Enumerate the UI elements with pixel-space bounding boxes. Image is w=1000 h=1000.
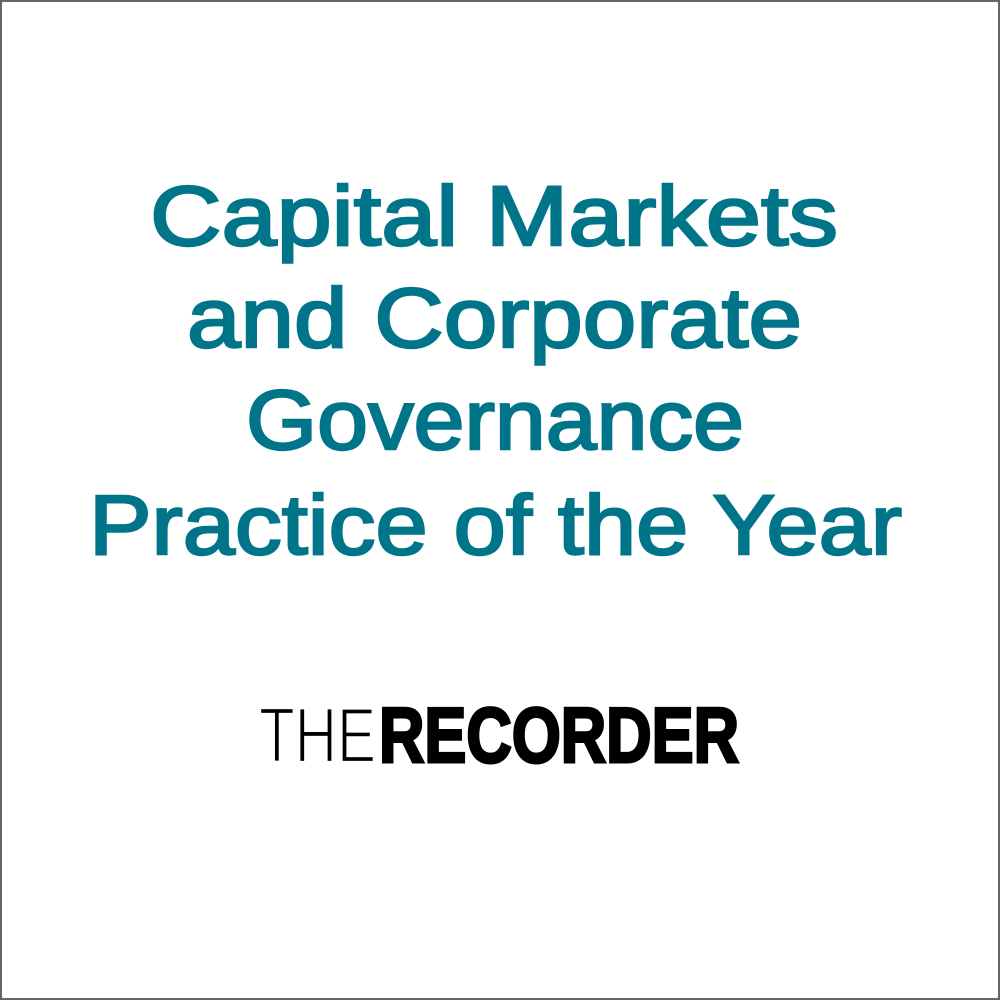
title: Capital Markets — [150, 169, 838, 263]
logo: The Recorder: RECORDER — [379, 691, 739, 779]
title: and Corporate — [187, 271, 802, 365]
title: Practice of the Year — [89, 478, 902, 572]
title: Governance — [246, 373, 744, 467]
logo: The Recorder — [259, 691, 739, 779]
title — [89, 169, 902, 572]
logo: The Recorder: THE — [259, 691, 376, 779]
